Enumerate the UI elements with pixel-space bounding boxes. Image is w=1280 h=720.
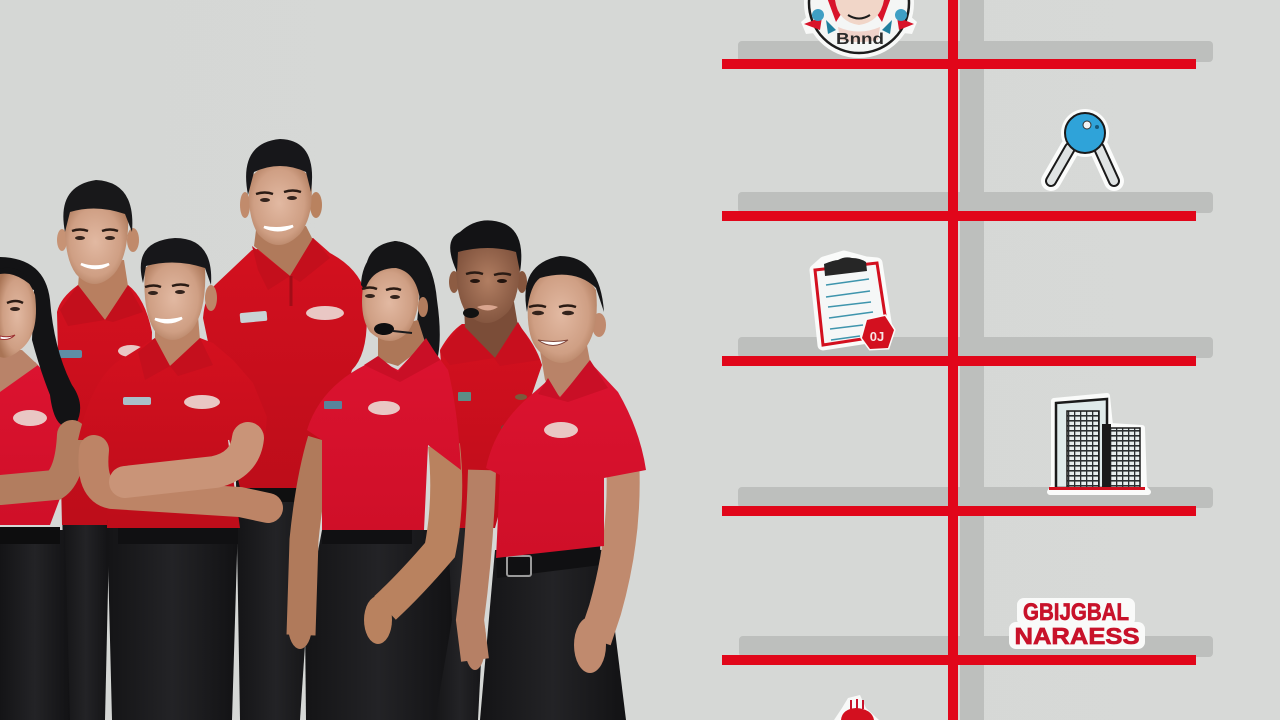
- person: tall man: [203, 139, 367, 720]
- label: global sticker text: GBIJGBAL: [1023, 599, 1129, 626]
- timeline red lines: [722, 0, 1196, 720]
- person: center woman: [288, 241, 461, 720]
- timeline: [722, 0, 1213, 720]
- team photo group: [0, 139, 646, 720]
- person: back right man: [432, 220, 542, 720]
- icon: keys: [1051, 109, 1114, 181]
- person: front man: [78, 238, 268, 720]
- label: global sticker text: NARAESS: [1014, 623, 1140, 649]
- person: back left man: [57, 180, 152, 720]
- icon: mascot badge: [801, 0, 917, 58]
- icon: clipboard: 0J: [870, 329, 884, 344]
- person: right woman: [464, 256, 646, 720]
- icon: mascot badge: Bnnd: [836, 31, 884, 48]
- label: global sticker text: [1009, 598, 1145, 649]
- icon: cake: [834, 695, 879, 720]
- icon: clipboard: [815, 256, 894, 349]
- person: left woman: [0, 257, 80, 720]
- icon: buildings: [1049, 396, 1148, 492]
- timeline shadows: [738, 0, 1213, 720]
